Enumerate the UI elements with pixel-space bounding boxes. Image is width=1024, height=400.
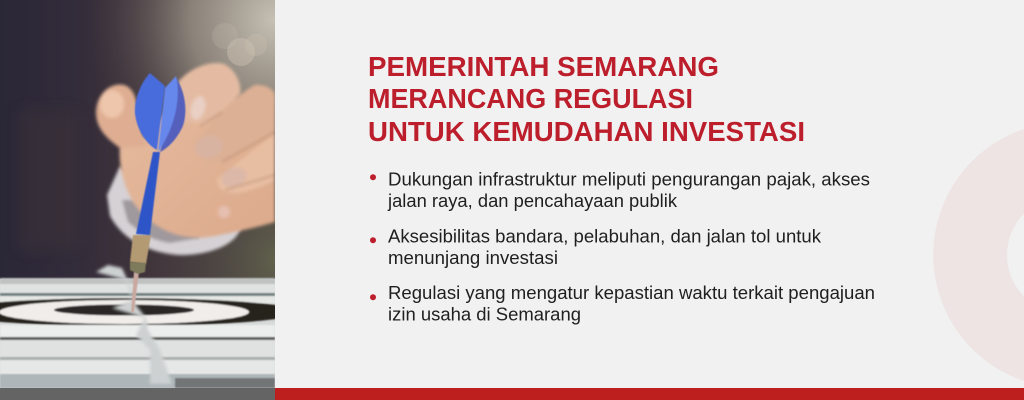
bullet 2: Aksesibilitas bandara, pelabuhan, dan jalan tol untuk bbox=[388, 225, 822, 246]
index finger bbox=[178, 63, 240, 125]
wire spider bbox=[96, 265, 172, 384]
bullet 1: Dukungan infrastruktur meliputi pengurangan pajak, akses bbox=[388, 168, 870, 190]
bullet 1 bbox=[370, 168, 870, 211]
dart bbox=[130, 73, 185, 312]
middle finger bbox=[236, 83, 275, 102]
dartboard bbox=[0, 265, 299, 388]
bullet list bbox=[370, 168, 875, 324]
nails bbox=[190, 96, 206, 121]
ring finger bbox=[218, 134, 275, 193]
dart tip bbox=[131, 272, 139, 312]
heading: PEMERINTAH SEMARANG bbox=[368, 51, 719, 82]
bottom bar: red segment bbox=[275, 388, 1024, 400]
heading: MERANCANG REGULASI bbox=[368, 83, 693, 114]
decorative ring bbox=[933, 122, 1024, 388]
photo: hand throwing a blue dart at a dartboard bbox=[0, 0, 299, 388]
thumb bbox=[96, 84, 148, 148]
hand bbox=[96, 63, 275, 238]
palm bbox=[120, 95, 275, 238]
photo background: suit and bokeh bbox=[0, 0, 275, 285]
bullet 2: menunjang investasi bbox=[388, 247, 558, 268]
bullet 1: jalan raya, dan pencahayaan publik bbox=[387, 190, 678, 211]
bullet 3: Regulasi yang mengatur kepastian waktu terkait pengajuan bbox=[388, 282, 875, 303]
dart barrel bbox=[130, 235, 151, 264]
dart shaft bbox=[136, 152, 160, 235]
bullet 3 bbox=[370, 282, 875, 324]
bullet 3: izin usaha di Semarang bbox=[388, 304, 581, 324]
bottom bar: grey segment bbox=[0, 388, 275, 400]
shirt cuff bbox=[107, 166, 241, 255]
heading bbox=[368, 51, 805, 147]
finger creases bbox=[200, 112, 275, 190]
heading: UNTUK KEMUDAHAN INVESTASI bbox=[368, 116, 805, 147]
dart flights bbox=[135, 73, 165, 150]
bullet 2 bbox=[370, 225, 822, 268]
